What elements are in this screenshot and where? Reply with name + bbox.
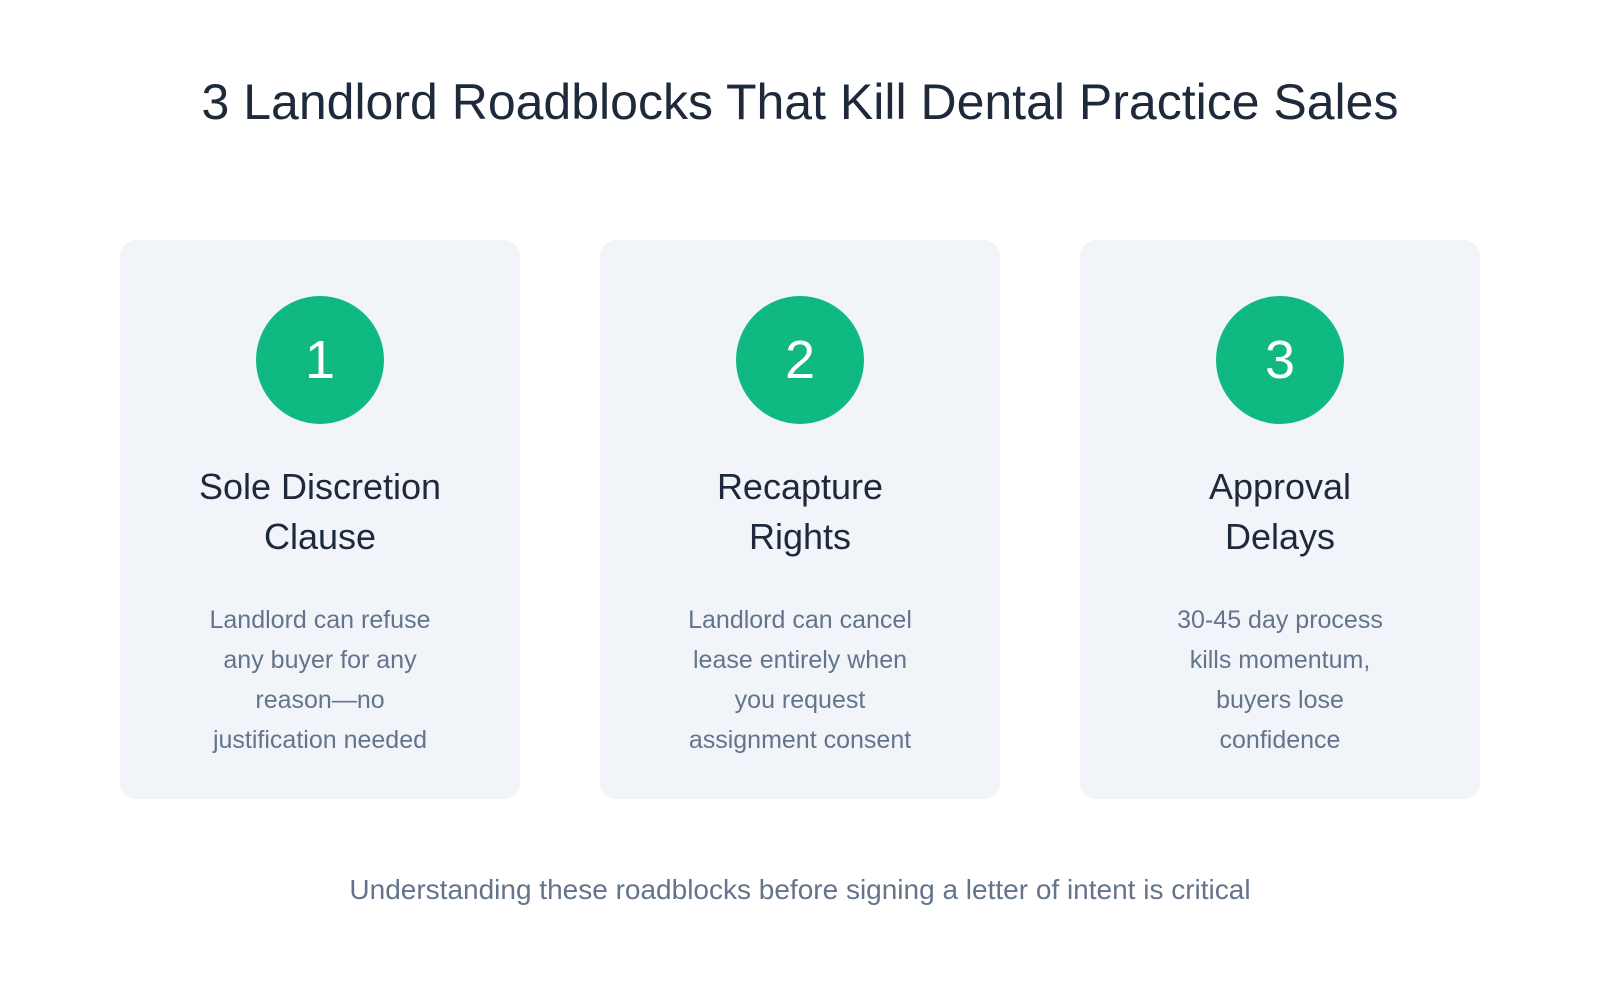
heading 1: Clause — [264, 516, 376, 557]
text 3: kills momentum, — [1190, 646, 1370, 674]
text 3 — [1177, 606, 1383, 754]
heading 1: Sole Discretion — [199, 466, 441, 507]
text 1: reason—no — [255, 686, 385, 714]
text 2: Landlord can cancel — [688, 606, 912, 634]
heading 2 — [717, 466, 883, 557]
title: 3 Landlord Roadblocks That Kill Dental Practice Sales — [202, 74, 1398, 130]
panel: sole discretion — [120, 240, 520, 799]
text 2: assignment consent — [689, 726, 911, 754]
text 3: buyers lose — [1216, 686, 1344, 714]
panel: approval delays — [1080, 240, 1480, 799]
text 3: confidence — [1220, 726, 1340, 754]
text 1: any buyer for any — [223, 646, 417, 674]
text 2: you request — [735, 686, 865, 714]
icon: number 1: 1 — [305, 330, 335, 390]
panel: recapture rights — [600, 240, 1000, 799]
text 2 — [688, 606, 912, 754]
footer note: Understanding these roadblocks before signing a letter of intent is critical — [349, 874, 1251, 905]
icon: number 2 — [736, 296, 864, 424]
text 2: lease entirely when — [693, 646, 907, 674]
heading 3: Approval — [1209, 466, 1351, 507]
icon: number 2: 2 — [785, 330, 815, 390]
icon: number 3 — [1216, 296, 1344, 424]
text 1: justification needed — [213, 726, 427, 754]
heading 2: Rights — [749, 516, 851, 557]
heading 3: Delays — [1225, 516, 1335, 557]
heading 1 — [199, 466, 441, 557]
heading 2: Recapture — [717, 466, 883, 507]
heading 3 — [1209, 466, 1351, 557]
text 1 — [210, 606, 430, 754]
text 1: Landlord can refuse — [210, 606, 430, 634]
icon: number 3: 3 — [1265, 330, 1295, 390]
icon: number 1 — [256, 296, 384, 424]
text 3: 30-45 day process — [1177, 606, 1383, 634]
